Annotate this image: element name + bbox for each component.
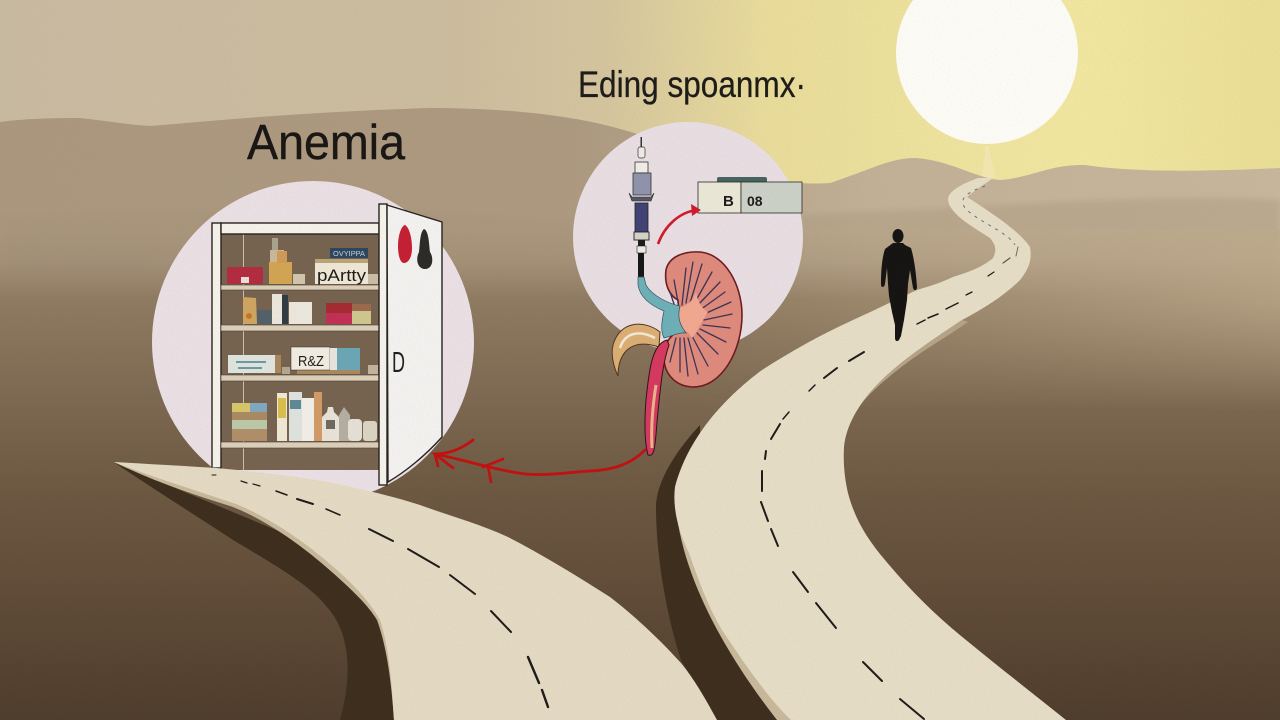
kidney body (664, 252, 742, 387)
shelves (221, 285, 379, 448)
centre dashes (212, 475, 548, 707)
far edge shading (860, 320, 968, 406)
icon: syringe (629, 137, 654, 277)
road surface (114, 462, 717, 720)
road: left road (114, 462, 717, 720)
renal sinus (676, 292, 708, 338)
heading: Anemia: Anemia (247, 116, 406, 170)
icon: box (698, 177, 802, 213)
icon: sun (896, 0, 1078, 144)
right road cast shadow (656, 425, 800, 720)
cabinet frame (212, 223, 379, 468)
background: mid hill band (0, 198, 1280, 340)
icon: box: B (723, 193, 734, 210)
third shelf items (228, 347, 378, 374)
road surface (674, 178, 1066, 720)
background: far hills (0, 108, 1280, 340)
figure: walking person silhouette (881, 229, 917, 341)
cabinet door (379, 204, 442, 485)
arrow: syringe to box (658, 204, 701, 244)
door mark: red (398, 225, 412, 263)
renal pelvis and tube (638, 277, 686, 338)
road: right winding road (674, 178, 1066, 720)
icon: kidney (612, 252, 742, 455)
arrow: kidney to cabinet (435, 440, 645, 482)
cabinet interior (221, 234, 379, 470)
circle backdrop (152, 181, 474, 503)
third shelf items: R&Z (298, 353, 324, 370)
distant road dashes (963, 186, 1015, 245)
top shelf items (227, 238, 378, 285)
door mark: black (417, 229, 432, 269)
second shelf items (243, 294, 371, 324)
interior seam (243, 234, 244, 470)
panel: syringe and kidney circle (573, 122, 803, 455)
kidney veins (670, 262, 732, 376)
pink ureter (645, 340, 669, 455)
centre dashes (761, 247, 1018, 719)
road edge shading (675, 495, 800, 720)
door handle: D (392, 347, 405, 379)
circle backdrop (573, 122, 803, 352)
road edge (114, 462, 420, 720)
background: foreground ground (0, 230, 1280, 720)
icon: box: 08 (747, 193, 763, 209)
panel: medicine cabinet circle (152, 181, 474, 503)
top shelf items: OVYIPPA (333, 251, 365, 258)
bottom shelf items (232, 392, 377, 441)
road shadow (115, 463, 394, 720)
tan horn (612, 324, 660, 376)
top shelf items: pArtty (317, 266, 367, 285)
distant glow at end of road (981, 146, 996, 178)
heading: garbled label: Eding spoanmx· (578, 64, 806, 105)
